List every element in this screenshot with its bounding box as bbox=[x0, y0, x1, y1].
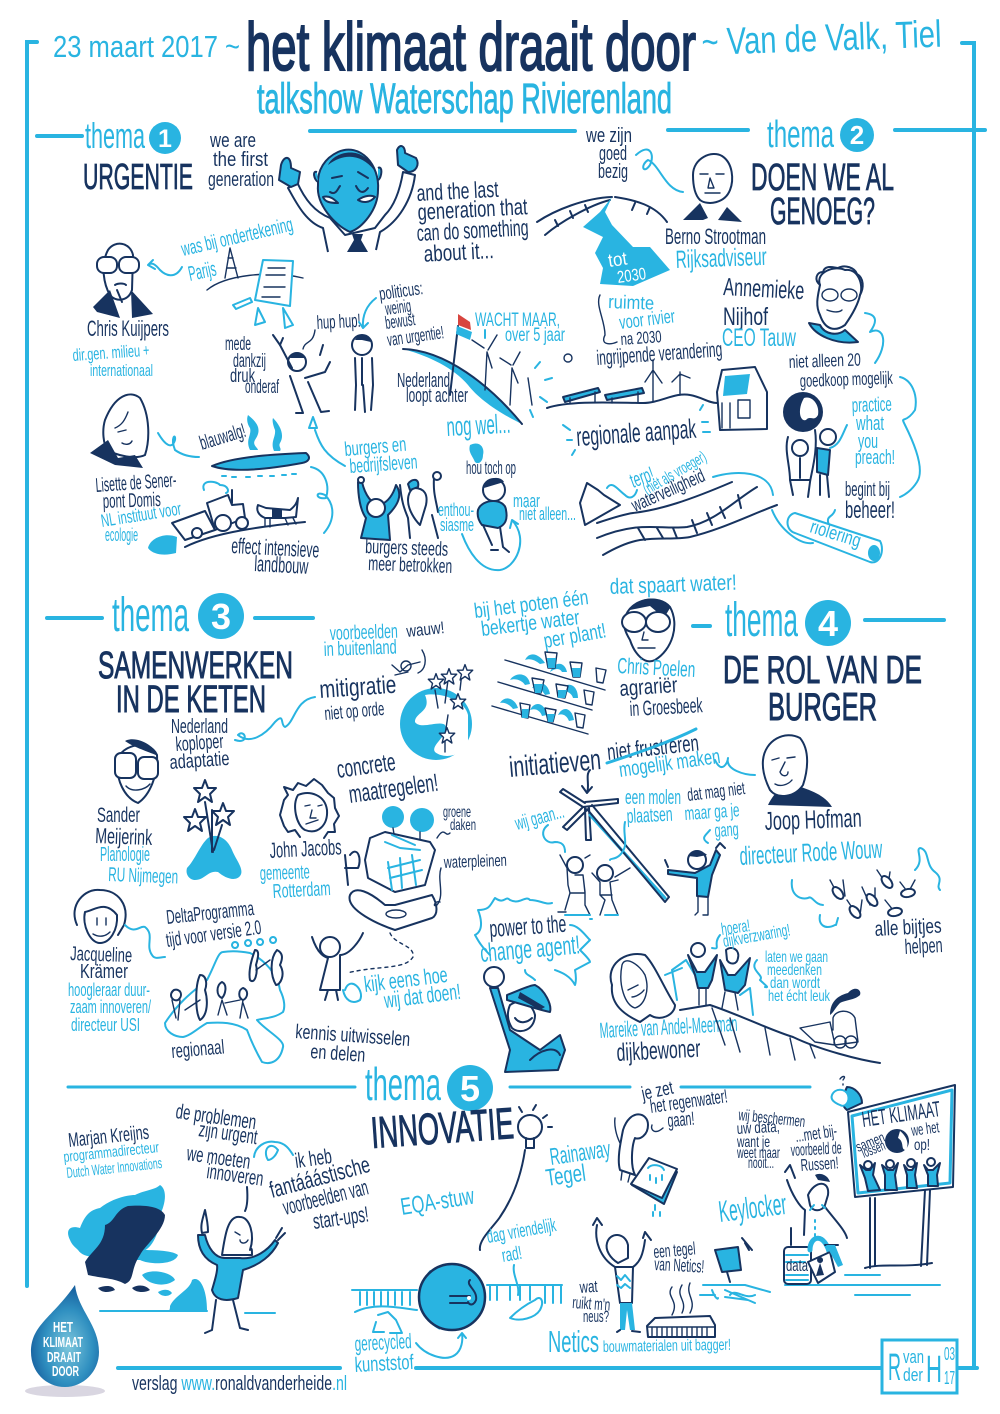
icon: cups and plants bbox=[492, 652, 606, 734]
text ruimte voor rivier: voor rivier bbox=[618, 306, 677, 334]
Rainaway Tegel: je zet bbox=[639, 1078, 676, 1105]
figure: hou toch op bbox=[438, 409, 576, 570]
data safe and lock: data bbox=[786, 1256, 808, 1275]
thema 2 heading: GENOEG? bbox=[770, 191, 875, 233]
voorbeelden buitenland: in buitenland bbox=[323, 636, 397, 661]
map: tot 2030 river: tot bbox=[607, 248, 629, 272]
dike with people and bulldozer: dan wordt bbox=[770, 975, 820, 992]
initiatieven: mogelijk maken bbox=[617, 745, 722, 782]
subtitle: talkshow Waterschap Rivierenland bbox=[257, 75, 672, 123]
figure: holding the earth: preach! bbox=[855, 447, 895, 469]
thema 3 heading: thema bbox=[112, 589, 189, 642]
concrete maatregelen building: daken bbox=[450, 817, 476, 834]
kennis uitwisselen bbox=[295, 1021, 411, 1067]
concrete maatregelen building: maatregelen! bbox=[347, 769, 440, 809]
quote per plant: bij het poten één bbox=[473, 586, 590, 623]
quote: problemen urgent: zijn urgent bbox=[197, 1118, 259, 1149]
figure: hup hup activist bbox=[273, 311, 361, 413]
signature box: H bbox=[926, 1349, 942, 1391]
thema 3 heading: IN DE KETEN bbox=[116, 679, 266, 721]
icon: bees: alle bijtjes bbox=[874, 915, 942, 941]
logo: water drop: HET bbox=[53, 1319, 73, 1336]
figure: windmill and people: een molen bbox=[625, 787, 681, 809]
figure: politician: politicus: bbox=[378, 278, 424, 304]
tractor effect landbouw: effect intensieve bbox=[231, 533, 320, 563]
quote goed bezig bbox=[585, 125, 683, 192]
figure: windmill and people: plaatsen bbox=[626, 804, 673, 828]
figure: politician: weinig bbox=[383, 296, 412, 319]
quote goed bezig: bezig bbox=[598, 161, 628, 183]
quotes Keylocker: ...met bij- bbox=[794, 1121, 838, 1146]
figure: windmill and people bbox=[512, 778, 746, 919]
portrait Chris Kuijpers bbox=[93, 244, 153, 318]
icon: recycle gerecycled kunststof bbox=[354, 1312, 466, 1377]
thema 2 heading: DOEN WE AL bbox=[751, 157, 894, 199]
turtle bbox=[832, 1076, 862, 1110]
Delta programma map: tijd voor versie 2.0 bbox=[165, 917, 263, 952]
name John Jacobs bbox=[259, 834, 342, 903]
thema 1 heading: thema bbox=[85, 115, 146, 156]
text mede dankzij druk onderaf bbox=[225, 334, 279, 398]
map: tot 2030 river: 2030 bbox=[616, 264, 647, 287]
dike with people and bulldozer: hoera! bbox=[720, 916, 751, 939]
date: 23 maart 2017 ~ bbox=[53, 29, 240, 64]
Delta programma map: regionaal bbox=[171, 1036, 225, 1063]
quote first generation: the first bbox=[213, 149, 268, 171]
thema 1 heading: URGENTIE bbox=[83, 156, 193, 197]
Delta programma map: DeltaProgramma bbox=[165, 898, 256, 929]
name Chris Poelen bbox=[617, 653, 703, 721]
name Chris Kuijpers: dir.gen. milieu + bbox=[72, 341, 150, 365]
panel: thema 2 doen we al genoeg bbox=[537, 114, 920, 562]
name Joop Hofman: directeur Rode Wouw bbox=[739, 834, 883, 871]
figure: change agent bbox=[484, 967, 565, 1072]
Delta programma map bbox=[165, 898, 284, 1063]
name Chris Poelen: agrariër bbox=[619, 672, 678, 701]
icon: recycle gerecycled kunststof: gerecycled bbox=[354, 1330, 412, 1356]
Rainaway Tegel bbox=[544, 1078, 729, 1216]
voorbeelden buitenland bbox=[323, 618, 445, 675]
icon: recycle gerecycled kunststof: kunststof bbox=[354, 1351, 414, 1377]
name Sander Meijerink: RU Nijmegen bbox=[108, 864, 179, 888]
portrait Jacqueline Kramer bbox=[74, 890, 165, 958]
logo: water drop: DRAAIT bbox=[47, 1349, 81, 1366]
label Parijs: Parijs bbox=[186, 258, 218, 286]
Nederland koploper bbox=[169, 697, 315, 774]
thema 3 heading bbox=[98, 589, 293, 721]
blauwalg: blauwalg! bbox=[197, 420, 248, 455]
portrait Annemieke Nijhof bbox=[809, 266, 863, 343]
kennis uitwisselen: en delen bbox=[310, 1041, 366, 1067]
name Marjan Kreijns bbox=[63, 1122, 163, 1182]
name Lisette: Lisette de Sener- bbox=[95, 469, 177, 497]
portrait Joop Hofman bbox=[763, 735, 832, 807]
Rainaway Tegel: het regenwater! bbox=[649, 1086, 729, 1118]
name Lisette bbox=[95, 469, 183, 545]
quote: problemen urgent: de problemen bbox=[174, 1100, 258, 1134]
dike with people and bulldozer: het écht leuk bbox=[768, 988, 831, 1005]
burgers bbox=[309, 417, 453, 578]
name Chris Kuijpers: Chris Kuijpers bbox=[87, 316, 169, 341]
icon: sewer pipe riolering bbox=[772, 510, 882, 562]
data safe and lock bbox=[784, 1228, 835, 1284]
text ruimte voor rivier: na 2030 bbox=[620, 327, 662, 349]
arrow: swirl between tractor and burgers bbox=[311, 467, 332, 533]
portrait Chris Poelen bbox=[622, 598, 674, 661]
thema 4 heading bbox=[723, 594, 922, 729]
Nederland koploper: Nederland bbox=[171, 716, 228, 738]
dike with people and bulldozer: meedenken bbox=[767, 962, 822, 979]
logo: water drop: KLIMAAT bbox=[43, 1334, 83, 1351]
mitigratie earth: niet op orde bbox=[324, 699, 385, 725]
quote goed bezig: goed bbox=[599, 143, 627, 165]
figure: holding the earth: niet alleen 20 bbox=[788, 349, 861, 372]
thema 3 heading: SAMENWERKEN bbox=[98, 645, 293, 687]
icon: bees: helpen bbox=[904, 934, 943, 959]
figure: windmill and people: dat mag niet bbox=[686, 778, 746, 805]
panel: thema 4 de rol van de burger bbox=[473, 570, 943, 1072]
text mede dankzij druk onderaf: onderaf bbox=[245, 377, 279, 398]
thema 5 heading: thema bbox=[365, 1058, 441, 1110]
billboard: het klimaat: op! bbox=[914, 1137, 930, 1154]
figure: hou toch op: enthou- bbox=[438, 500, 474, 520]
quotes Keylocker: weet maar bbox=[736, 1145, 780, 1162]
name Berno Strootman bbox=[665, 224, 767, 274]
quote: fantastische startups bbox=[254, 1142, 373, 1234]
figure: holding the earth: you bbox=[858, 431, 878, 453]
landscape: Nederland loopt achter: over 5 jaar bbox=[505, 325, 565, 346]
figure: Netics man: ruikt m'n bbox=[572, 1293, 611, 1315]
landscape: regionale aanpak bbox=[547, 360, 767, 455]
panel: thema 5 innovatie bbox=[63, 1058, 955, 1377]
quote per plant: per plant! bbox=[542, 619, 608, 653]
thema 1 heading bbox=[83, 115, 193, 197]
name John Jacobs: Rotterdam bbox=[272, 878, 331, 903]
panel: thema 4 de rol van de burger: Mareike van Andel-Meerman bbox=[599, 1011, 738, 1043]
figure: Netics man: van Netics! bbox=[654, 1254, 705, 1277]
quotes Keylocker: uw data, bbox=[736, 1119, 780, 1138]
name Joop Hofman: Joop Hofman bbox=[764, 803, 862, 836]
text mede dankzij druk onderaf: mede bbox=[225, 334, 251, 355]
signature box: van bbox=[903, 1347, 924, 1367]
text ruimte voor rivier bbox=[564, 292, 723, 370]
landscape: Nederland loopt achter: WACHT MAAR, bbox=[475, 310, 560, 331]
name Annemieke Nijhof: Annemieke bbox=[723, 273, 805, 305]
quote last generation: can do something bbox=[416, 214, 529, 246]
quotes Keylocker: nooit... bbox=[748, 1155, 774, 1172]
text ruimte voor rivier: ruimte bbox=[608, 292, 655, 315]
name Marjan Kreijns: Dutch Water Innovations bbox=[66, 1155, 163, 1182]
Netics label bbox=[548, 1324, 731, 1359]
figure: holding the earth: goedkoop mogelijk bbox=[799, 368, 894, 391]
figure: hou toch op: siasme bbox=[440, 515, 474, 535]
signature box: 17 bbox=[944, 1368, 955, 1388]
Nederland koploper: adaptatie bbox=[169, 748, 230, 774]
name Sander Meijerink: Sander bbox=[97, 804, 140, 827]
burgers: bedrijfsleven bbox=[349, 451, 418, 478]
billboard: het klimaat bbox=[848, 1085, 955, 1268]
Nederland koploper: koploper bbox=[175, 731, 224, 756]
figure: hou toch op: niet alleen... bbox=[519, 504, 576, 524]
label Parijs: was bij ondertekening bbox=[179, 214, 295, 261]
figure: holding the earth: begint bij bbox=[845, 479, 890, 501]
Keylocker bbox=[700, 1188, 940, 1303]
name Marjan Kreijns: Marjan Kreijns bbox=[67, 1122, 150, 1152]
quotes Keylocker: want je bbox=[736, 1134, 770, 1151]
name Jacqueline Kramer: Krämer bbox=[80, 961, 128, 983]
text mede dankzij druk onderaf: druk bbox=[230, 366, 255, 387]
burgers: meer betrokken bbox=[368, 553, 453, 578]
name Annemieke Nijhof: CEO Tauw bbox=[722, 324, 797, 352]
figure: windmill and people: maar ga je bbox=[684, 800, 740, 825]
Netics label: bouwmaterialen uit bagger! bbox=[603, 1337, 731, 1356]
swirl: curved connector right bbox=[865, 313, 920, 497]
dike with people and bulldozer: laten we gaan bbox=[765, 949, 828, 966]
dike: waterveiligheid: waterveiligheid bbox=[628, 466, 708, 517]
icon: Netherlands with stars bbox=[184, 780, 241, 880]
quote: fantastische startups: start-ups! bbox=[311, 1201, 370, 1234]
billboard: het klimaat: lossen bbox=[859, 1137, 887, 1161]
tractor effect landbouw: landbouw bbox=[254, 551, 309, 579]
figure: hup hup activist: hup hup! bbox=[316, 311, 361, 334]
quote: problemen urgent: innoveren bbox=[205, 1160, 265, 1191]
Rainaway Tegel: gaan! bbox=[667, 1109, 695, 1132]
tractor effect landbouw bbox=[148, 482, 320, 579]
EQA stuw: EQA-stuw bbox=[399, 1183, 476, 1221]
dike with people and bulldozer: dijkverzwaring! bbox=[721, 920, 792, 951]
dike: waterveiligheid: terp! bbox=[627, 463, 657, 493]
thema 2 heading: 2 bbox=[850, 120, 864, 150]
figure: hou toch op: hou toch op bbox=[466, 458, 516, 478]
portrait Mareike bbox=[611, 954, 675, 1022]
thema 5 heading: 5 bbox=[460, 1068, 480, 1109]
signature box bbox=[882, 1340, 957, 1393]
figure: holding the earth: what bbox=[855, 413, 884, 435]
quotes Keylocker: Russen! bbox=[800, 1153, 839, 1175]
figure: hou toch op: maar bbox=[513, 491, 540, 511]
name Jacqueline Kramer: zaam innoveren/ bbox=[70, 997, 151, 1017]
arrow to Chris bbox=[148, 260, 182, 275]
quote: fantastische startups: ik heb bbox=[293, 1145, 333, 1173]
quotes Keylocker: voorbeeld de bbox=[790, 1138, 842, 1160]
figure: kijk eens: kijk eens hoe bbox=[363, 962, 449, 997]
title block bbox=[53, 9, 942, 123]
burgers: burgers en bbox=[344, 434, 407, 461]
icon: Netics tile with steam bbox=[647, 1283, 715, 1337]
figure: hou toch op: nog wel... bbox=[446, 409, 511, 442]
arrow Lisette bbox=[158, 433, 199, 457]
name Jacqueline Kramer bbox=[68, 943, 151, 1035]
map: tot 2030 river bbox=[537, 197, 670, 287]
quote last generation: generation that bbox=[417, 193, 529, 225]
panel: thema 1 urgentie bbox=[72, 115, 576, 579]
figure: woman speaker bbox=[198, 1187, 285, 1333]
signature box: 03 bbox=[944, 1344, 955, 1364]
name Jacqueline Kramer: directeur USI bbox=[71, 1015, 140, 1035]
blauwalg bbox=[197, 415, 309, 477]
Keylocker: Keylocker bbox=[717, 1188, 788, 1229]
figure: politician: bewust bbox=[384, 309, 416, 333]
dike with people and bulldozer bbox=[665, 916, 880, 1063]
concrete maatregelen building bbox=[335, 748, 507, 930]
figure: holding the earth bbox=[783, 349, 895, 524]
name Jacqueline Kramer: Jacqueline bbox=[70, 943, 133, 967]
landscape: Nederland loopt achter: Nederland bbox=[397, 370, 450, 392]
name Berno Strootman: Berno Strootman bbox=[665, 224, 766, 249]
billboard: het klimaat: we het bbox=[910, 1119, 941, 1140]
name Berno Strootman: Rijksadviseur bbox=[675, 243, 767, 274]
icon: smoke cloud bbox=[68, 1185, 275, 1313]
dike: waterveiligheid: (niet als vroeger) bbox=[640, 449, 710, 498]
main title: het klimaat draait door bbox=[246, 9, 696, 85]
dat spaart water: dat spaart water! bbox=[609, 570, 737, 599]
Rainaway Tegel: Rainaway bbox=[548, 1136, 612, 1171]
figure: politician bbox=[352, 278, 445, 412]
portrait Lisette bbox=[90, 394, 148, 468]
initiatieven: initiatieven bbox=[508, 744, 602, 784]
figure: windmill and people: gang bbox=[714, 819, 739, 842]
name Annemieke Nijhof: Nijhof bbox=[723, 303, 768, 331]
figure: Netics man: wat bbox=[578, 1277, 598, 1297]
speech burst: change agent: change agent! bbox=[479, 929, 581, 968]
figure: windmill and people: wij gaan... bbox=[512, 802, 567, 835]
icon: bees bbox=[792, 848, 943, 959]
quote first generation: generation bbox=[208, 169, 274, 191]
name Chris Poelen: in Groesbeek bbox=[629, 694, 703, 721]
icon: sewer pipe riolering: riolering bbox=[808, 517, 863, 552]
footer credit: verslag www.ronaldvanderheide.nl bbox=[132, 1373, 347, 1395]
name Lisette: NL instituut voor bbox=[99, 499, 183, 531]
EQA stuw: dag vriendelijk bbox=[485, 1215, 558, 1248]
landscape: regionale aanpak: regionale aanpak bbox=[575, 414, 697, 452]
concrete maatregelen building: concrete bbox=[335, 748, 397, 784]
name Sander Meijerink: Meijerink bbox=[95, 823, 153, 850]
name Joop Hofman bbox=[739, 803, 883, 871]
quote last generation: about it... bbox=[423, 237, 494, 267]
figure: kijk eens: wij dat doen! bbox=[382, 979, 462, 1013]
name Lisette: ecologie bbox=[105, 525, 138, 545]
quote per plant bbox=[473, 586, 608, 653]
burgers: burgers steeds bbox=[365, 536, 449, 561]
name Chris Kuijpers: internationaal bbox=[90, 361, 153, 380]
landscape: Nederland loopt achter bbox=[397, 310, 565, 424]
EQA stuw: rad! bbox=[500, 1243, 524, 1267]
figure: holding the earth: beheer! bbox=[845, 497, 895, 524]
figure: Netics man: neus? bbox=[583, 1307, 609, 1326]
name Sander Meijerink: Planologie bbox=[100, 844, 150, 866]
quote: problemen urgent: we moeten bbox=[185, 1142, 252, 1174]
quote last generation: and the last bbox=[416, 176, 500, 206]
voorbeelden buitenland: wauw! bbox=[405, 618, 445, 641]
thema 2 heading: thema bbox=[767, 114, 835, 156]
initiatieven: niet frustreren bbox=[606, 729, 700, 765]
thema 2 heading bbox=[751, 114, 894, 233]
figure: Keylocker man bbox=[785, 1165, 847, 1267]
quote per plant: bekertje water bbox=[480, 606, 581, 641]
quotes Keylocker bbox=[736, 1107, 842, 1175]
quote first generation: we are bbox=[209, 130, 256, 152]
logo: water drop: DOOR bbox=[52, 1363, 79, 1380]
name Chris Poelen: Chris Poelen bbox=[617, 653, 696, 682]
speech burst: change agent: power to the bbox=[489, 911, 567, 943]
quote: problemen urgent bbox=[174, 1100, 265, 1191]
signature box: R bbox=[888, 1347, 901, 1389]
name Marjan Kreijns: programmadirecteur bbox=[63, 1139, 160, 1166]
figure: holding the earth: practice bbox=[851, 394, 892, 417]
quotes Keylocker: wij beschermen bbox=[737, 1107, 806, 1131]
thema 3 heading: 3 bbox=[211, 596, 231, 637]
portrait Sander Meijerink bbox=[115, 739, 158, 803]
Rainaway Tegel: Tegel bbox=[544, 1160, 587, 1192]
name Mareike bbox=[599, 1011, 738, 1067]
icon: Paris agreement bbox=[207, 248, 303, 328]
initiatieven bbox=[508, 729, 755, 793]
name Lisette: pont Domis bbox=[102, 489, 161, 513]
quote last generation bbox=[414, 174, 531, 267]
thema 4 heading: 4 bbox=[818, 603, 838, 644]
dike: waterveiligheid bbox=[580, 449, 777, 555]
icon: light bulb bbox=[480, 1105, 552, 1250]
quote goed bezig: we zijn bbox=[585, 125, 632, 147]
concrete maatregelen building: waterpleinen bbox=[443, 851, 507, 872]
EQA stuw bbox=[352, 1183, 562, 1330]
billboard: het klimaat: samen bbox=[853, 1129, 887, 1155]
portrait John Jacobs bbox=[280, 779, 339, 838]
quote: fantastische startups: voorbeelden van bbox=[280, 1175, 371, 1220]
figure: politician: van urgentie! bbox=[386, 322, 445, 350]
figure: man with raised arms bbox=[279, 146, 418, 252]
figure: Netics man: een tegel bbox=[653, 1238, 696, 1262]
speech burst: change agent bbox=[475, 898, 590, 985]
label Parijs bbox=[179, 214, 295, 286]
thema 1 heading: 1 bbox=[158, 125, 172, 153]
name Sander Meijerink bbox=[95, 804, 179, 888]
name Mareike: dijkbewoner bbox=[616, 1035, 701, 1067]
landscape: Nederland loopt achter: loopt achter bbox=[406, 385, 468, 407]
thema 5 heading bbox=[365, 1058, 515, 1158]
name John Jacobs: John Jacobs bbox=[269, 834, 342, 863]
thema 5 heading: INNOVATIE bbox=[369, 1099, 515, 1158]
quote first generation bbox=[208, 130, 274, 191]
voorbeelden buitenland: voorbeelden bbox=[329, 621, 398, 645]
mitigratie earth bbox=[318, 665, 473, 760]
kennis uitwisselen: kennis uitwisselen bbox=[295, 1021, 411, 1051]
text ruimte voor rivier: ingrijpende verandering bbox=[596, 338, 723, 370]
signature box: der bbox=[903, 1365, 923, 1385]
concrete maatregelen building: groene bbox=[443, 804, 471, 821]
name Chris Kuijpers bbox=[72, 316, 169, 380]
figure: kijk eens bbox=[312, 933, 462, 1013]
text mede dankzij druk onderaf: dankzij bbox=[233, 351, 266, 372]
figure: Netics man bbox=[572, 1218, 705, 1332]
panel: thema 3 samenwerken in de keten bbox=[68, 589, 507, 1067]
quote: fantastische startups: fantááástische bbox=[267, 1151, 373, 1203]
logo: water drop bbox=[25, 1285, 105, 1397]
name Annemieke Nijhof bbox=[722, 273, 805, 352]
thema 4 heading: thema bbox=[725, 594, 798, 647]
thema 4 heading: BURGER bbox=[768, 686, 877, 729]
mitigratie earth: mitigratie bbox=[318, 671, 397, 704]
Netics label: Netics bbox=[548, 1324, 599, 1359]
name Jacqueline Kramer: hoogleraar duur- bbox=[68, 980, 150, 1000]
portrait Berno Strootman bbox=[683, 154, 742, 222]
name John Jacobs: gemeente bbox=[259, 861, 310, 885]
